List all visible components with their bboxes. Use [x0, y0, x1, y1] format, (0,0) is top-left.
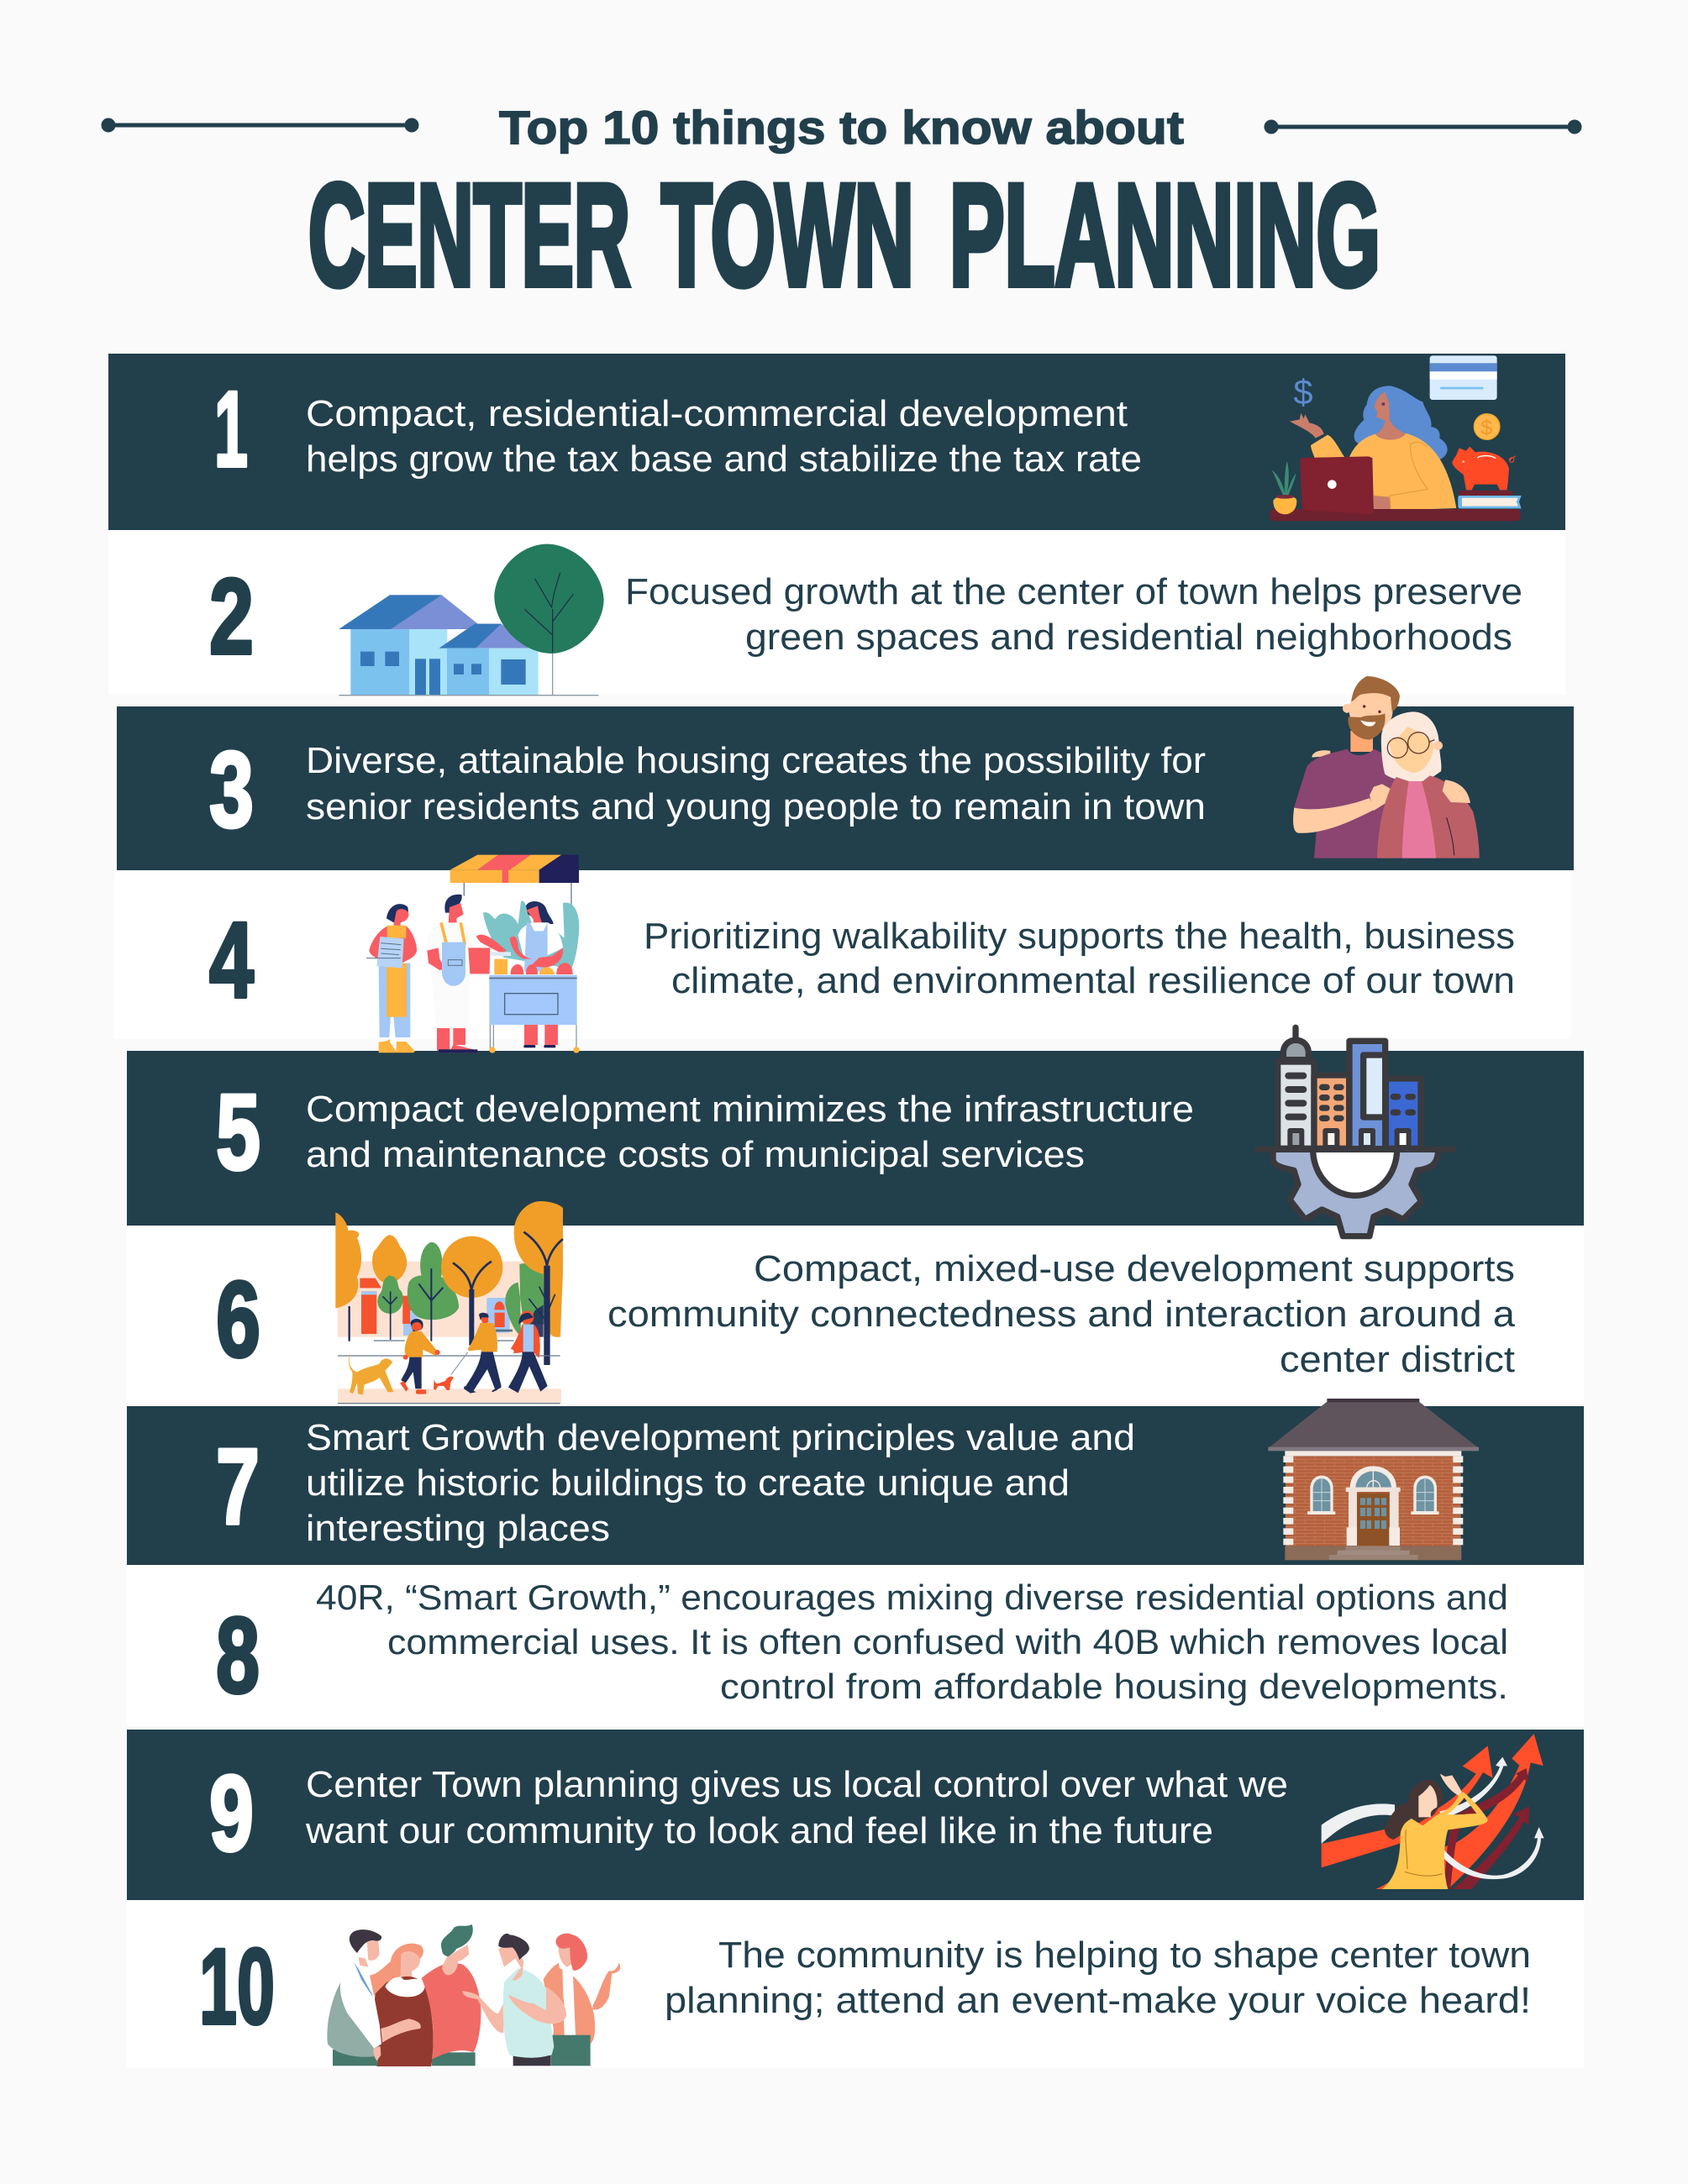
text 7: interesting places [306, 1508, 610, 1549]
text 7 [306, 1417, 1135, 1549]
text 1 [306, 393, 1142, 480]
number 5: 5 [216, 1073, 260, 1193]
number 3: 3 [209, 730, 254, 850]
text 6: Compact, mixed-use development supports [754, 1248, 1515, 1289]
text 8: commercial uses. It is often confused with 40B which removes local [387, 1622, 1508, 1662]
panel 5 background [127, 1051, 1584, 1226]
number 2: 2 [209, 557, 254, 677]
panel 1 background [108, 354, 1565, 530]
text 6 [607, 1248, 1516, 1380]
text 1: helps grow the tax base and stabilize the tax rate [306, 438, 1142, 480]
icon: market stall with three people [366, 855, 580, 1053]
text 8: control from affordable housing developments. [720, 1667, 1508, 1706]
text 2: green spaces and residential neighborhoods [745, 617, 1512, 658]
text 4: Prioritizing walkability supports the health, business [644, 916, 1515, 957]
icon: people walking dogs in a park [335, 1201, 563, 1404]
text 8 [316, 1578, 1508, 1706]
icon: woman with laptop, card and piggy bank [1270, 355, 1522, 521]
text 2: Focused growth at the center of town helps preserve [625, 571, 1522, 612]
text 10: The community is helping to shape center town [718, 1935, 1531, 1976]
icon: woman with laptop, card and piggy bank: $ [1293, 372, 1313, 412]
text 6: center district [1280, 1339, 1515, 1380]
icon: woman with rising arrows [1322, 1734, 1544, 1889]
icon: man and older woman embracing [1293, 676, 1480, 858]
header: right divider [1265, 120, 1581, 134]
text 5: and maintenance costs of municipal services [306, 1134, 1085, 1175]
number 1: 1 [214, 370, 248, 490]
panel 2 background [108, 530, 1565, 695]
icon: woman with laptop, card and piggy bank: $ [1480, 416, 1492, 439]
icon: group of five people talking [327, 1924, 620, 2066]
text 5: Compact development minimizes the infrastructure [306, 1089, 1194, 1130]
text 9: want our community to look and feel like in the future [305, 1810, 1213, 1851]
icon: historic brick building [1268, 1399, 1479, 1560]
title: PLANNING [949, 155, 1380, 316]
title: TOWN [661, 155, 914, 316]
text 9 [305, 1764, 1288, 1851]
panel 6 background [127, 1226, 1584, 1403]
panel 9 background [127, 1730, 1584, 1900]
text 7: utilize historic buildings to create unique and [306, 1462, 1070, 1504]
text 2 [625, 571, 1522, 658]
text 3 [306, 740, 1206, 827]
panel 10 background [127, 1900, 1584, 2068]
number 10: 10 [199, 1927, 275, 2047]
text 10: planning; attend an event-make your voice heard! [665, 1980, 1531, 2021]
panel 7 background [127, 1406, 1584, 1565]
text 7: Smart Growth development principles value and [306, 1417, 1135, 1458]
panel 4 background [114, 870, 1571, 1039]
number 9: 9 [209, 1754, 254, 1874]
icon: city on a gear [1257, 1027, 1454, 1236]
text 8: 40R, “Smart Growth,” encourages mixing diverse residential options and [316, 1578, 1508, 1617]
text 3: senior residents and young people to remain in town [306, 786, 1206, 827]
text 3: Diverse, attainable housing creates the possibility for [306, 740, 1206, 781]
text 4 [644, 916, 1515, 1001]
subtitle: Top 10 things to know about [499, 101, 1184, 154]
icon: houses and tree [339, 544, 604, 696]
text 5 [306, 1089, 1194, 1175]
text 10 [665, 1935, 1531, 2021]
title [308, 155, 1380, 316]
text 4: climate, and environmental resilience of our town [671, 960, 1515, 1001]
text 1: Compact, residential-commercial development [306, 393, 1128, 434]
header: left divider [102, 118, 418, 132]
panel 3 background [117, 706, 1574, 870]
number 7: 7 [216, 1427, 260, 1547]
text 6: community connectedness and interaction around a [607, 1294, 1516, 1335]
number 8: 8 [216, 1596, 260, 1716]
text 9: Center Town planning gives us local control over what we [306, 1764, 1288, 1805]
number 6: 6 [216, 1260, 260, 1380]
panel 8 background [127, 1565, 1584, 1726]
number 4: 4 [209, 900, 254, 1021]
title: CENTER [308, 155, 630, 316]
